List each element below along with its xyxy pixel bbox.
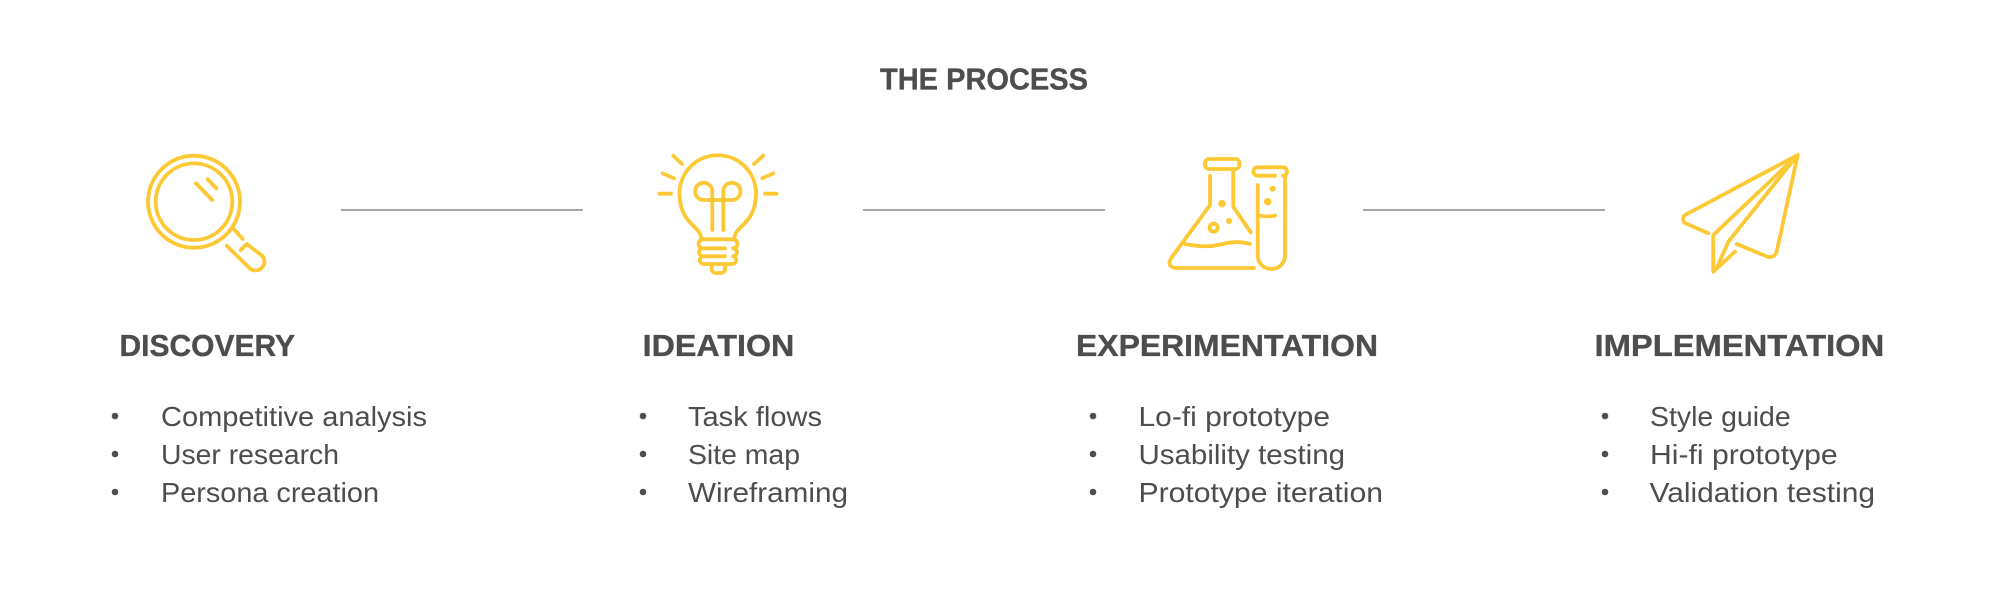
list: discovery: Persona creation [161,477,379,508]
list: experimentation [1090,401,1383,508]
panel: discovery [112,156,427,508]
list: experimentation: Lo-fi prototype [1138,401,1330,432]
list: ideation: Task flows [688,401,822,432]
list: discovery: Competitive analysis [161,401,427,432]
connector line 1 [341,209,583,211]
list: discovery: User research [161,439,339,470]
panel: experimentation [1076,159,1383,508]
list: ideation [640,401,848,508]
icon: flask and test tube [1170,159,1287,269]
list: discovery [112,401,427,508]
connector line 3 [1363,209,1605,211]
icon: magnifying glass [148,156,264,270]
panel: ideation [640,155,848,508]
heading: implementation: IMPLEMENTATION [1594,328,1884,363]
title: THE PROCESS [880,62,1088,96]
heading: discovery: DISCOVERY [120,328,295,363]
list: experimentation: Prototype iteration [1138,477,1383,508]
list: experimentation: Usability testing [1138,439,1345,470]
heading: ideation: IDEATION [643,328,794,363]
list: implementation: Hi-fi prototype [1650,439,1838,470]
panel: implementation [1594,155,1884,508]
heading: experimentation: EXPERIMENTATION [1076,328,1378,363]
list: implementation: Validation testing [1650,477,1875,508]
list: ideation: Site map [688,439,800,470]
list: implementation: Style guide [1650,401,1791,432]
connector line 2 [863,209,1105,211]
list: implementation [1602,401,1875,508]
list: ideation: Wireframing [688,477,848,508]
icon: light bulb [659,155,777,273]
icon: paper plane [1683,155,1798,272]
